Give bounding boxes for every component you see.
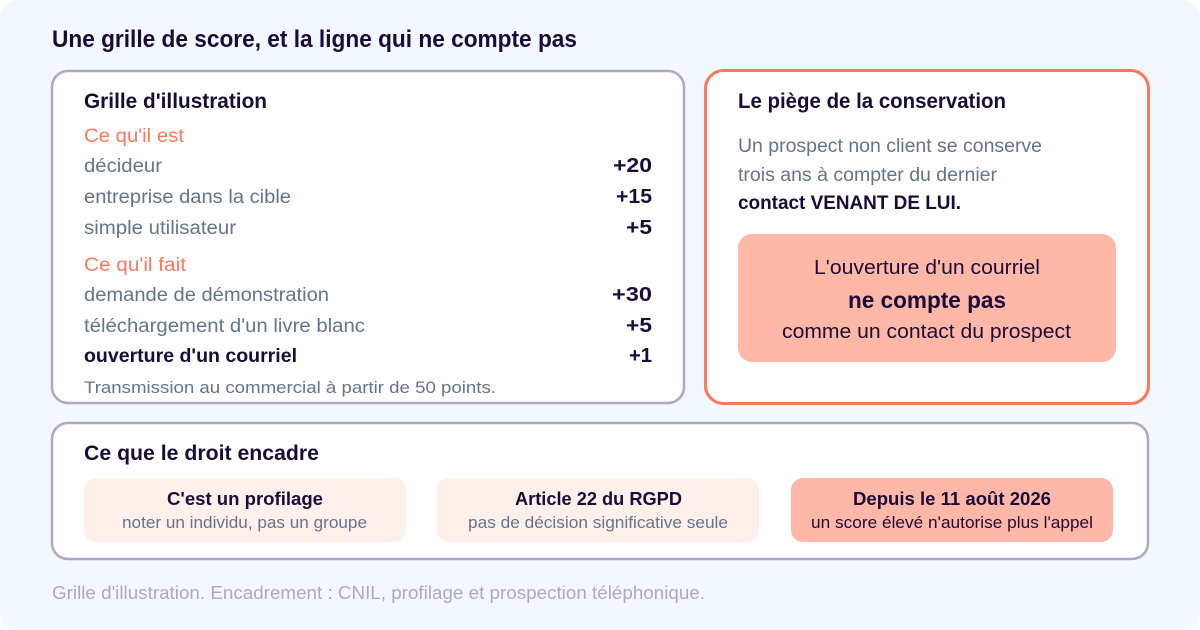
- callout: ne compte pas: [848, 287, 1006, 313]
- card: depuis le 11 août 2026: un score élevé n'autorise plus l'appel: [811, 513, 1093, 532]
- row: ouverture d'un courriel: [84, 344, 652, 367]
- panel heading: Le piège de la conservation: [738, 90, 1006, 113]
- card: depuis le 11 août 2026: Depuis le 11 août 2026: [853, 488, 1051, 509]
- explanatory text: contact VENANT DE LUI.: [738, 193, 961, 214]
- card: profilage: C'est un profilage: [167, 488, 323, 509]
- row: simple utilisateur: [84, 216, 652, 239]
- card: article 22: Article 22 du RGPD: [515, 488, 682, 509]
- footer source note: Grille d'illustration. Encadrement : CNIL, profilage et prospection téléphonique.: [52, 583, 705, 603]
- panel: le piège de la conservation: [706, 70, 1148, 404]
- card: depuis le 11 août 2026: [791, 478, 1113, 542]
- row: décideur: +20: [613, 154, 652, 177]
- panel: ce que le droit encadre: [52, 423, 1148, 559]
- row: demande de démonstration: demande de démonstration: [84, 285, 329, 306]
- explanatory text: Un prospect non client se conserve: [738, 136, 1042, 157]
- panel heading: Grille d'illustration: [84, 90, 267, 113]
- threshold note: Transmission au commercial à partir de 50 points.: [84, 378, 496, 397]
- row: demande de démonstration: [84, 283, 652, 306]
- section label: ce qu'il est: Ce qu'il est: [84, 126, 185, 147]
- callout: [738, 234, 1116, 362]
- section label: ce qu'il fait: Ce qu'il fait: [84, 255, 187, 276]
- card: profilage: noter un individu, pas un groupe: [122, 513, 367, 532]
- explanatory text: trois ans à compter du dernier: [738, 165, 998, 186]
- card: article 22: pas de décision significative seule: [468, 513, 728, 532]
- row: simple utilisateur: simple utilisateur: [84, 218, 237, 239]
- row: entreprise dans la cible: +15: [616, 185, 652, 208]
- row: simple utilisateur: +5: [626, 216, 652, 239]
- card: article 22: [437, 478, 759, 542]
- row: demande de démonstration: +30: [612, 283, 652, 306]
- row: entreprise dans la cible: entreprise dans la cible: [84, 187, 291, 208]
- row: ouverture d'un courriel: +1: [629, 344, 652, 367]
- panel: grille d'illustration: [52, 71, 684, 403]
- card: profilage: [84, 478, 406, 542]
- row: décideur: décideur: [84, 156, 163, 177]
- row: téléchargement d'un livre blanc: téléchargement d'un livre blanc: [84, 316, 365, 337]
- row: ouverture d'un courriel: ouverture d'un courriel: [84, 346, 297, 367]
- row: décideur: [84, 154, 652, 177]
- title: Une grille de score, et la ligne qui ne compte pas: [52, 26, 577, 53]
- callout: L'ouverture d'un courriel: [814, 257, 1040, 279]
- row: téléchargement d'un livre blanc: [84, 314, 652, 337]
- callout: comme un contact du prospect: [782, 321, 1071, 343]
- row: téléchargement d'un livre blanc: +5: [626, 314, 652, 337]
- row: entreprise dans la cible: [84, 185, 652, 208]
- explanatory text: [738, 136, 1042, 214]
- panel heading: Ce que le droit encadre: [84, 442, 319, 465]
